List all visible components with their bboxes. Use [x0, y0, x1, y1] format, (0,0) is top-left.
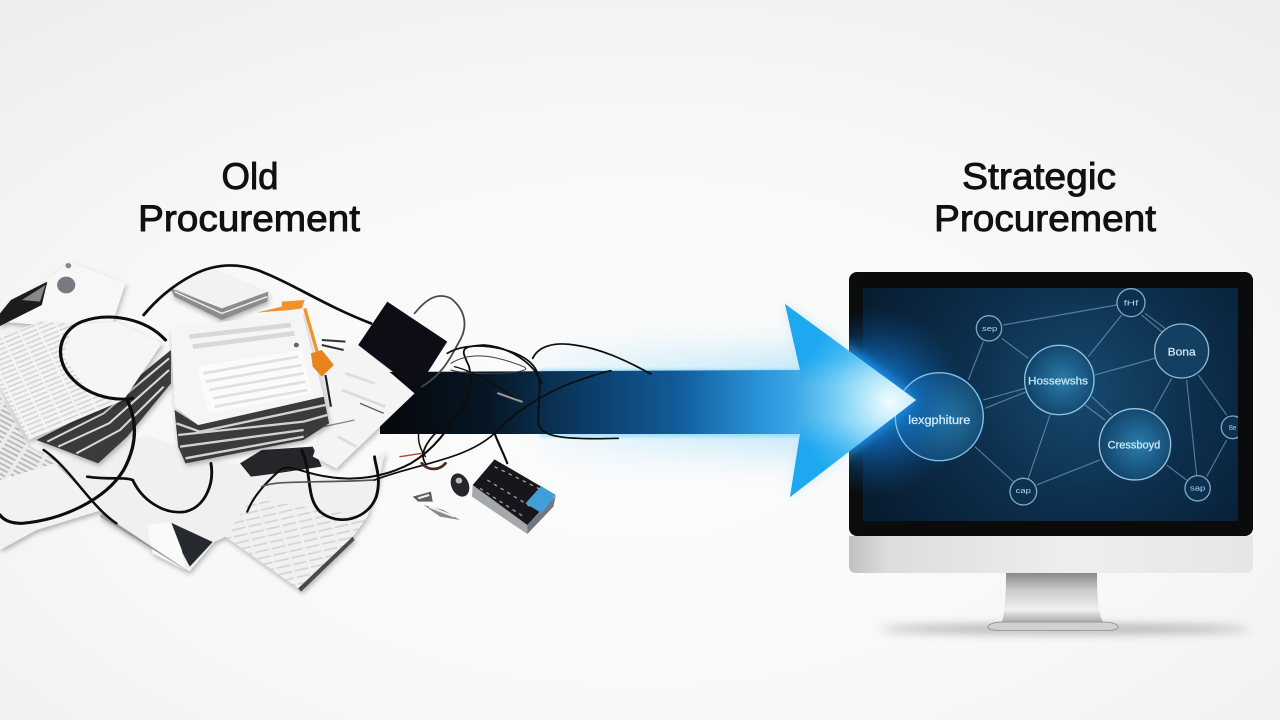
small node labels: cap: [1016, 486, 1031, 495]
node: centre: Hossewshs: [1028, 375, 1088, 387]
network diagram: [895, 289, 1244, 505]
monitor stand: [988, 573, 1118, 630]
transformation arrow: [380, 304, 916, 497]
heading: Old Procurement: Old: [222, 156, 278, 197]
dark scatter under stack: [240, 447, 322, 477]
pile of paperwork and cables: [0, 262, 651, 592]
heading: Strategic Procurement: Strategic: [962, 156, 1116, 197]
monitor shadow: [880, 625, 1250, 633]
node: lower right: Cressboyd: [1108, 440, 1160, 452]
small node labels: fHf: [1124, 299, 1140, 308]
network links: [968, 305, 1227, 485]
small node labels: sap: [1190, 483, 1205, 492]
node: top right: Bona: [1168, 346, 1196, 358]
small nodes: [976, 289, 1244, 505]
monitor: [849, 272, 1253, 633]
right paper: [313, 345, 415, 468]
left open pages: [0, 322, 162, 440]
small node labels: Be: [1229, 423, 1236, 432]
monitor chin: [849, 536, 1253, 573]
monitor screen: [863, 288, 1244, 521]
node: left circle: [895, 373, 983, 461]
node: centre: [1025, 345, 1094, 415]
monitor bezel: [849, 272, 1253, 536]
heading: Old Procurement: [138, 156, 361, 239]
node: left outline and label: lexgphiture: [908, 415, 970, 427]
node: lower right: [1099, 409, 1171, 480]
left stack: [36, 350, 171, 463]
black device: [358, 302, 447, 390]
top chevron stack: [170, 268, 268, 320]
node: top right: [1155, 324, 1209, 378]
heading: Old Procurement: Procurement: [138, 198, 361, 239]
heading: Strategic Procurement: Procurement: [934, 198, 1157, 239]
cables: [0, 265, 651, 523]
small connectors: [413, 471, 473, 520]
blue glow on screen: [849, 313, 956, 491]
orange clip: [256, 300, 345, 407]
router: [472, 459, 556, 534]
back papers: [0, 262, 385, 592]
centre paper stack: [171, 312, 329, 463]
node: left outline and label: [895, 373, 983, 461]
small node labels: [982, 299, 1236, 495]
heading: Strategic Procurement: [934, 156, 1157, 239]
small node labels: sep: [982, 324, 997, 333]
